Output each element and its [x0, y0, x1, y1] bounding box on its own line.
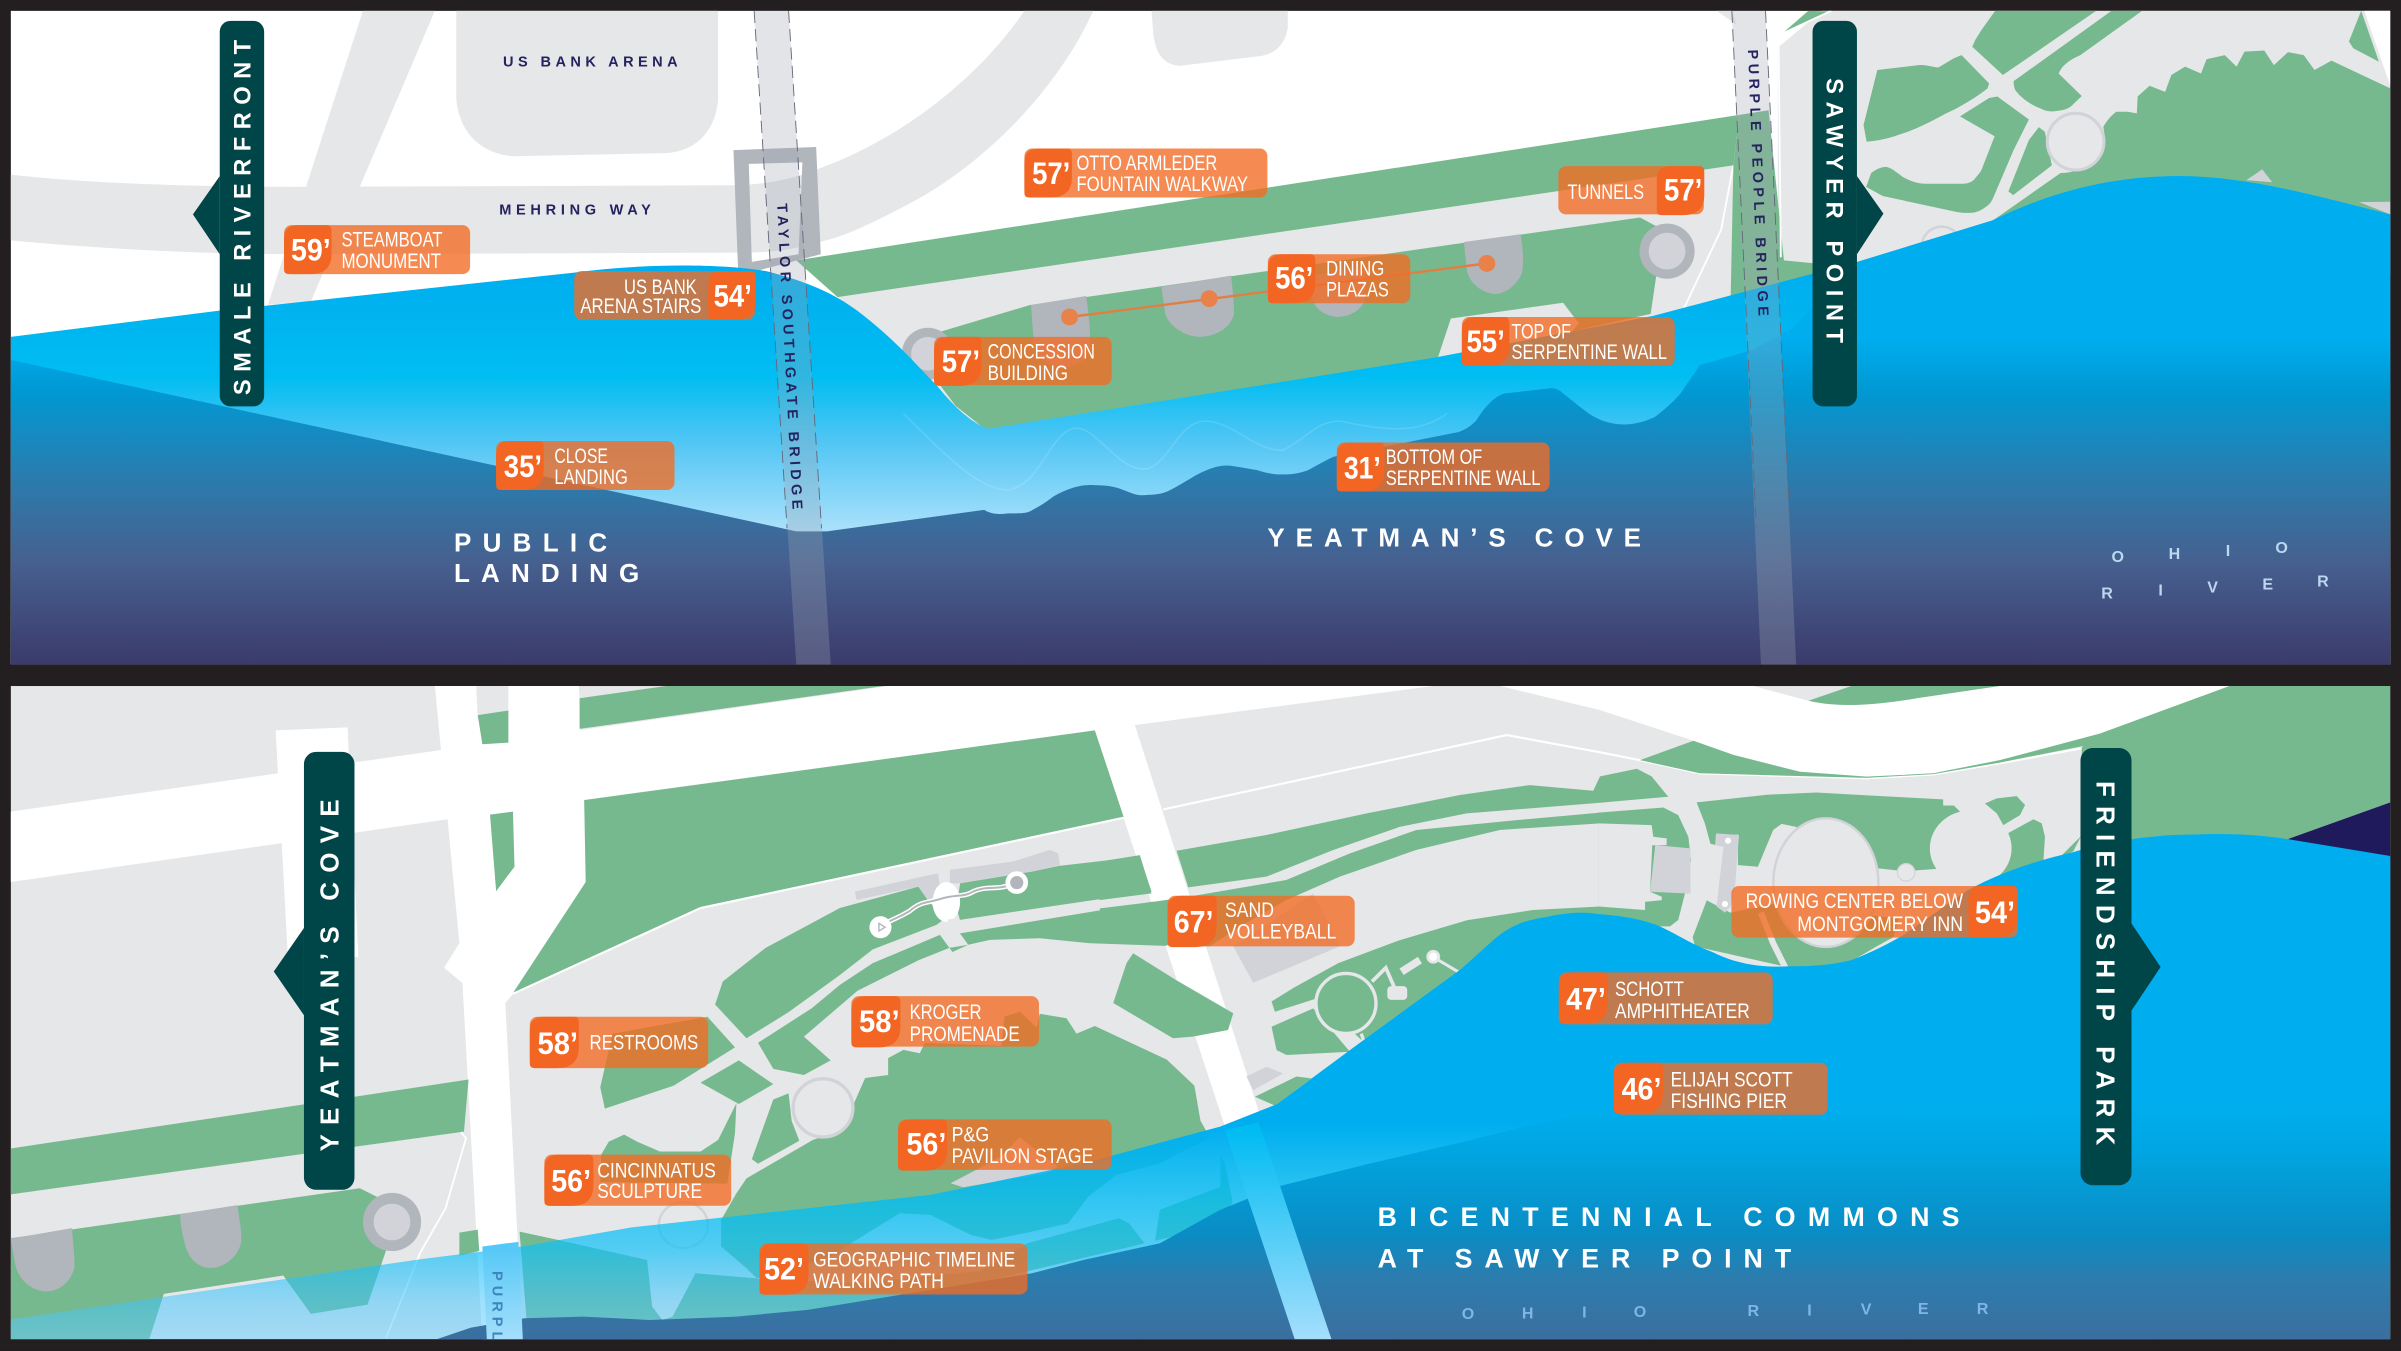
ring lawn [1316, 973, 1376, 1033]
bridge: Purple People deck [1732, 11, 1796, 665]
callout: Dining Plazas 56: DINING [1326, 257, 1384, 281]
road: Mehring Way and arena blocks [11, 11, 2390, 459]
sign: Sawyer Point: SAWYER POINT [1821, 78, 1847, 344]
callout: Otto Armleder Fountain Walkway 57: FOUNTAIN WALKWAY [1076, 172, 1248, 196]
map label: US Bank Arena: US BANK ARENA [503, 54, 678, 70]
rowing center path [1761, 913, 1787, 971]
water: shallow layer [11, 176, 2390, 665]
water: shallow translucent layer [11, 834, 2390, 1341]
callout: Kroger Promenade 58: 58’ [859, 1004, 900, 1039]
lawn: left promenade strip [11, 1188, 390, 1341]
bridge label: Purple People: PURPLE PEOPLE BRIDGE [1744, 49, 1771, 316]
bridge tower frame [733, 147, 821, 273]
callout: Dining Plazas 56 [1268, 254, 1410, 303]
river label: Ohio River: OHIO [2111, 539, 2288, 566]
callout: Tunnels 57 [1558, 166, 1704, 215]
rowing center oval [1773, 818, 1878, 947]
river label: Ohio River: OHIORIVER [1462, 1300, 1989, 1323]
callout: Kroger Promenade 58: KROGER [910, 1000, 982, 1024]
callout: Concession Building 57: CONCESSION [988, 339, 1095, 363]
rowing arch lawn with grey core [1599, 807, 1691, 926]
callout: Bottom of Serpentine Wall 31: SERPENTINE WALL [1386, 466, 1540, 490]
callout: Elijah Scott Fishing Pier 46: ELIJAH SCOTT [1671, 1067, 1793, 1091]
court strip [1246, 1067, 1283, 1090]
callout: Close Landing 35: CLOSE [554, 444, 608, 468]
callout: Dining Plazas 56: 56’ [1275, 261, 1313, 296]
water: deep layer [11, 176, 2390, 665]
green band north [1640, 733, 2100, 778]
callout: Concession Building 57: BUILDING [988, 361, 1068, 385]
callout: Schott Amphitheater 47 [1559, 972, 1773, 1024]
callout: US Bank Arena Stairs 54 [574, 271, 756, 320]
callout: Otto Armleder Fountain Walkway 57: OTTO ARMLEDER [1076, 151, 1217, 175]
water: deep layer [430, 839, 2390, 1341]
white walkway lines [1681, 165, 1733, 314]
bridge label: Taylor Southgate: TAYLOR SOUTHGATE BRIDGE [773, 203, 805, 510]
callout: Restrooms 58: RESTROOMS [590, 1031, 698, 1055]
callout: Concession Building 57: 57’ [942, 344, 980, 379]
callout: Top of Serpentine Wall 55: SERPENTINE WALL [1511, 340, 1667, 364]
greens: east promenade bands [1099, 769, 1668, 946]
sign: Friendship Park: FRIENDSHIP PARK [2090, 781, 2120, 1146]
volleyball court [1233, 893, 1340, 983]
bridge label: Purple (cut off by panel edge): PURPL [488, 1271, 504, 1345]
rowing T-bar [1715, 833, 1739, 913]
heading: Public Landing: PUBLIC [454, 527, 607, 557]
fountain [855, 850, 1060, 942]
walkway line left [386, 1132, 466, 1338]
callout: Geographic Timeline Walking Path 52 [760, 1243, 1027, 1295]
sign: Sawyer Point [1813, 21, 1883, 406]
callout: Steamboat Monument 59: MONUMENT [341, 249, 441, 273]
callout: Steamboat Monument 59: 59’ [291, 232, 331, 267]
callout: Steamboat Monument 59 [284, 225, 470, 274]
heading: Public Landing: LANDING [454, 558, 639, 588]
panel: top map, Smale Riverfront to Sawyer Point [11, 11, 2390, 665]
callout: Close Landing 35: 35’ [504, 449, 542, 484]
callout: Rowing Center below Montgomery Inn 54: ROWING CENTER BELOW [1746, 889, 1964, 913]
tunnels circle [1640, 224, 1695, 279]
lawn: Yeatman's Cove park [937, 217, 1663, 430]
navy corner [2288, 802, 2390, 861]
heading: Bicentennial Commons at Sawyer Point: AT SAWYER POINT [1378, 1243, 1792, 1273]
callout: P&G Pavilion Stage 56 [898, 1119, 1112, 1171]
panel: bottom map, Yeatman's Cove to Friendship Park [11, 684, 2390, 1345]
pavilion stage [951, 1137, 1058, 1187]
river lawn [1255, 907, 1600, 1106]
callout: P&G Pavilion Stage 56: PAVILION STAGE [952, 1144, 1093, 1168]
heading: Yeatman's Cove: YEATMAN’S COVE [1267, 523, 1641, 553]
traffic circle [2047, 113, 2104, 170]
wave of paving in lawn [756, 1133, 1220, 1283]
callout: Sand Volleyball 67: SAND [1225, 898, 1274, 922]
callout: Otto Armleder Fountain Walkway 57: 57’ [1032, 156, 1070, 191]
road: north-east S-curve [1433, 686, 2230, 777]
callout: Top of Serpentine Wall 55 [1462, 317, 1675, 366]
sign: Smale Riverfront: SMALE RIVERFRONT [230, 39, 256, 395]
callout: Cincinnatus Sculpture 56: CINCINNATUS [597, 1159, 716, 1183]
callout: Sand Volleyball 67: VOLLEYBALL [1225, 920, 1336, 944]
callout: Kroger Promenade 58 [851, 996, 1039, 1047]
small connector circle [1897, 864, 1915, 881]
thin white line across promenade [1163, 735, 2082, 809]
callout: Cincinnatus Sculpture 56 [544, 1155, 731, 1206]
callout: Elijah Scott Fishing Pier 46: FISHING PIER [1671, 1089, 1787, 1113]
bridge right white edge [1779, 11, 1831, 257]
lawn: bridge approach [1730, 110, 1813, 296]
callout: Steamboat Monument 59: STEAMBOAT [341, 228, 443, 252]
Sawyer Point park greens [1782, 11, 2390, 230]
circle plaza left [363, 1193, 421, 1251]
dining plaza connector [1061, 255, 1495, 325]
callout: Concession Building 57 [934, 337, 1112, 386]
callout: Sand Volleyball 67 [1168, 896, 1355, 947]
callout: Bottom of Serpentine Wall 31: 31’ [1344, 451, 1381, 486]
callout: Dining Plazas 56: PLAZAS [1326, 277, 1389, 301]
heading: Bicentennial Commons at Sawyer Point: BICENTENNIAL COMMONS [1378, 1202, 1960, 1232]
lawn: big central lawn [520, 1012, 1233, 1341]
callout: Rowing Center below Montgomery Inn 54 [1731, 886, 2018, 938]
callout: Sand Volleyball 67: 67’ [1174, 905, 1214, 940]
callout: Bottom of Serpentine Wall 31: BOTTOM OF [1386, 445, 1482, 469]
ring plaza [793, 1079, 853, 1137]
callout: Top of Serpentine Wall 55: TOP OF [1511, 319, 1571, 343]
callout: US Bank Arena Stairs 54: 54’ [714, 278, 752, 313]
callout: P&G Pavilion Stage 56: P&G [952, 1122, 989, 1146]
ring walkway [1361, 951, 1458, 1043]
heading: Bicentennial Commons at Sawyer Point [1378, 1202, 1960, 1273]
heading: Public Landing [456, 533, 638, 582]
callout: Tunnels 57: TUNNELS [1568, 180, 1644, 204]
Montgomery circle [1930, 810, 2012, 886]
callout: Close Landing 35: LANDING [554, 465, 628, 489]
callout: Geographic Timeline Walking Path 52: WALKING PATH [813, 1269, 944, 1293]
callout: P&G Pavilion Stage 56: 56’ [906, 1127, 946, 1162]
road: volleyball cross street [1095, 724, 1263, 1141]
callout: Schott Amphitheater 47: AMPHITHEATER [1615, 999, 1750, 1023]
bridge deck under water [1225, 1122, 1332, 1341]
white corner at far right [2364, 11, 2390, 86]
callout: Close Landing 35 [496, 441, 675, 490]
road: long diagonal [11, 686, 1433, 882]
concession circle [902, 328, 948, 380]
plazas left [11, 1205, 241, 1291]
callout: Cincinnatus Sculpture 56: 56’ [551, 1163, 591, 1198]
top of serpentine wall paving [1437, 303, 1579, 361]
callout: Elijah Scott Fishing Pier 46 [1614, 1063, 1828, 1115]
water: faint contour [903, 413, 1447, 490]
green wedge top [1808, 686, 2000, 705]
green right of S-curve [2081, 686, 2390, 842]
small circle near water [1921, 226, 1956, 242]
callout: Otto Armleder Fountain Walkway 57 [1024, 149, 1267, 198]
callout: Geographic Timeline Walking Path 52: GEOGRAPHIC TIMELINE [813, 1247, 1015, 1271]
sign: Yeatman's Cove: YEATMAN’S COVE [314, 799, 344, 1152]
greens: central park islands [600, 857, 1233, 1184]
callout: Rowing Center below Montgomery Inn 54: MONTGOMERY INN [1797, 912, 1963, 936]
road segment grey fill [476, 684, 508, 720]
map label: Mehring Way: MEHRING WAY [499, 202, 651, 218]
callout: US Bank Arena Stairs 54: US BANK [624, 275, 697, 299]
rowing center garden [1693, 792, 2081, 968]
callout: Kroger Promenade 58: PROMENADE [910, 1022, 1020, 1046]
river label: Ohio River [2102, 542, 2328, 598]
callout: Elijah Scott Fishing Pier 46: 46’ [1622, 1071, 1661, 1106]
callout: Schott Amphitheater 47: SCHOTT [1615, 977, 1684, 1001]
callout: Restrooms 58 [530, 1017, 708, 1068]
callout: Bottom of Serpentine Wall 31 [1337, 443, 1550, 492]
river label: Ohio River: RIVER [2101, 572, 2329, 603]
pavilion bits at waterline [2246, 169, 2390, 214]
callout: Top of Serpentine Wall 55: 55’ [1466, 324, 1505, 359]
callout: Geographic Timeline Walking Path 52: 52’ [764, 1251, 804, 1286]
sign: Smale Riverfront [193, 21, 264, 406]
callout: Cincinnatus Sculpture 56: SCULPTURE [597, 1179, 702, 1203]
riverfront green strip [796, 115, 1740, 297]
white edge line [513, 818, 1124, 994]
greens: north strips [11, 686, 1124, 1256]
plazas [1031, 234, 1523, 368]
sign: Friendship Park [2081, 748, 2161, 1185]
callout: Restrooms 58: 58’ [537, 1026, 578, 1061]
road: vertical connector [435, 686, 586, 1341]
bridge: Taylor Southgate deck [754, 11, 831, 665]
callout: Tunnels 57: 57’ [1664, 173, 1702, 208]
purple bridge deck under water [482, 1242, 523, 1341]
sign: Yeatman's Cove [274, 752, 354, 1190]
callout: Schott Amphitheater 47: 47’ [1566, 982, 1606, 1017]
road: short spur behind sign [276, 727, 358, 957]
sculpture circle [659, 1202, 708, 1248]
callout: Rowing Center below Montgomery Inn 54: 54’ [1975, 895, 2015, 930]
callout: US Bank Arena Stairs 54: ARENA STAIRS [580, 294, 701, 318]
